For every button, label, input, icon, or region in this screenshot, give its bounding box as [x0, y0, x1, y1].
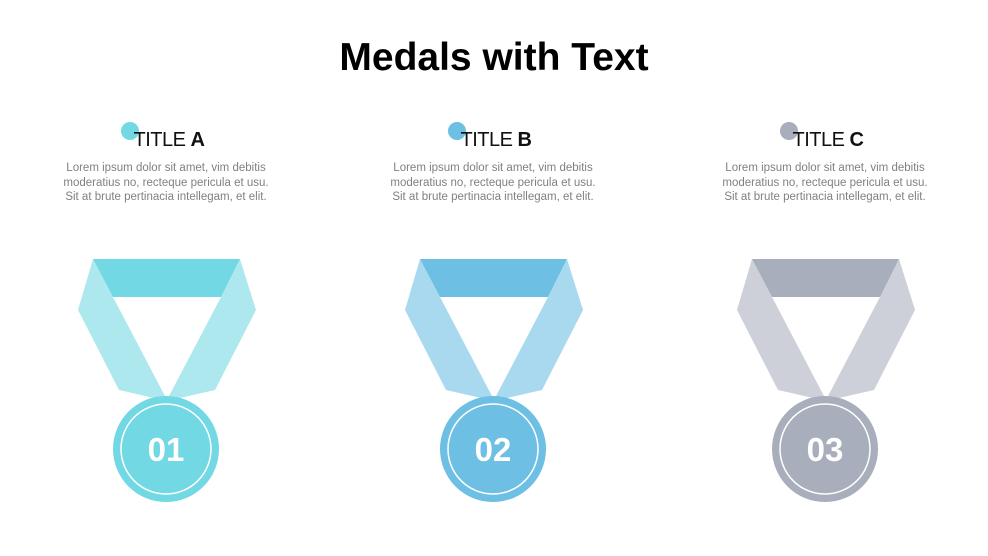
text B: Sit at brute pertinacia intellegam, et elit.	[392, 191, 594, 203]
panel: A text	[63, 122, 269, 203]
heading A: TITLE A	[134, 129, 204, 151]
medal C	[737, 259, 915, 502]
text C: Lorem ipsum dolor sit amet, vim debitis	[725, 162, 925, 174]
icon: dot C	[780, 122, 798, 140]
text C: moderatius no, recteque pericula et usu.	[722, 176, 928, 188]
text A: moderatius no, recteque pericula et usu.	[63, 176, 269, 188]
medal B: 02	[475, 431, 511, 468]
medal A	[78, 259, 256, 502]
title: Medals with Text	[339, 36, 649, 79]
text A	[63, 162, 269, 203]
text B: moderatius no, recteque pericula et usu.	[390, 176, 596, 188]
medal B	[405, 259, 583, 502]
heading B: TITLE B	[461, 129, 531, 151]
heading C: TITLE C	[793, 129, 863, 151]
text B: Lorem ipsum dolor sit amet, vim debitis	[393, 162, 593, 174]
text C	[722, 162, 928, 203]
text A: Lorem ipsum dolor sit amet, vim debitis	[66, 162, 266, 174]
icon: dot A	[121, 122, 139, 140]
medal A: 01	[148, 431, 184, 468]
panel: C text	[722, 122, 928, 203]
icon: dot B	[448, 122, 466, 140]
medal C: 03	[807, 431, 843, 468]
text B	[390, 162, 596, 203]
text C: Sit at brute pertinacia intellegam, et elit.	[724, 191, 926, 203]
text A: Sit at brute pertinacia intellegam, et elit.	[65, 191, 267, 203]
panel: B text	[390, 122, 596, 203]
